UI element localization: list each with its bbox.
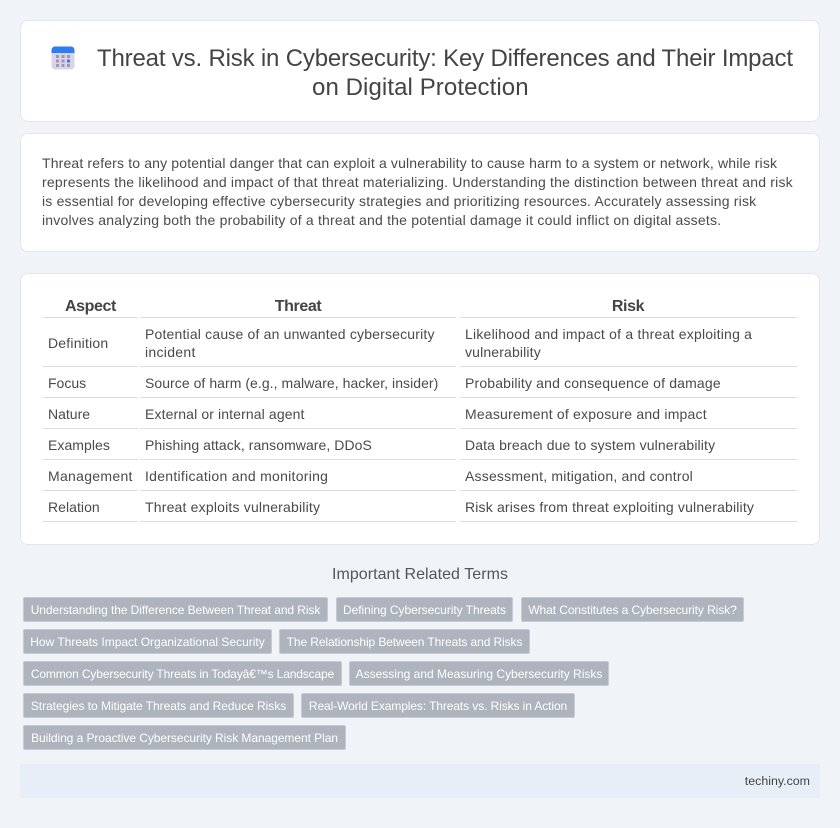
intro text: represents the likelihood and impact of that threat materializing. Understanding the distinction between threat and risk (42, 174, 793, 190)
tag: Common Cybersecurity Threats in Todayâ€™s Landscape (31, 667, 334, 681)
row: relation: Relation (48, 499, 100, 515)
header: threat: Threat (275, 298, 321, 315)
footer bar (20, 764, 820, 798)
row: definition: Definition (48, 335, 108, 351)
comparison table: Identification and monitoring (145, 468, 328, 484)
row: management: Management (48, 468, 133, 484)
row: focus: Focus (48, 375, 86, 391)
related terms tags (23, 597, 744, 750)
header card (20, 20, 820, 122)
comparison table: vulnerability (465, 344, 541, 360)
comparison table: Probability and consequence of damage (465, 375, 721, 391)
tag (23, 629, 272, 654)
tag: Assessing and Measuring Cybersecurity Risks (356, 667, 602, 681)
tag (301, 693, 575, 718)
intro text: is essential for developing effective cybersecurity strategies and prioritizing resources. Accurately assessing risk (42, 193, 756, 209)
intro text (42, 155, 793, 228)
tag (23, 597, 328, 622)
tag (279, 629, 530, 654)
comparison table: Assessment, mitigation, and control (465, 468, 693, 484)
header: risk: Risk (612, 298, 644, 315)
tag: Understanding the Difference Between Threat and Risk (31, 603, 320, 617)
tag: Strategies to Mitigate Threats and Reduce Risks (31, 699, 286, 713)
comparison table: incident (145, 344, 196, 360)
footer source text: techiny.com (745, 774, 810, 788)
tag (336, 597, 513, 622)
comparison table: Source of harm (e.g., malware, hacker, insider) (145, 375, 438, 391)
comparison table: Threat exploits vulnerability (145, 499, 320, 515)
comparison table: Potential cause of an unwanted cybersecurity (145, 326, 435, 342)
title: Threat vs. Risk in Cybersecurity: Key Differences and Their Impact (97, 45, 793, 72)
comparison table: Data breach due to system vulnerability (465, 437, 715, 453)
title: on Digital Protection (312, 74, 529, 101)
comparison table: Likelihood and impact of a threat exploiting a (465, 326, 752, 342)
tag (23, 693, 294, 718)
tag (349, 661, 609, 686)
tag (23, 661, 342, 686)
tag: Defining Cybersecurity Threats (343, 603, 506, 617)
tag (521, 597, 744, 622)
tag: How Threats Impact Organizational Security (30, 635, 265, 649)
row: nature: Nature (48, 406, 90, 422)
header: aspect: Aspect (65, 298, 116, 315)
row: examples: Examples (48, 437, 110, 453)
comparison table: Risk arises from threat exploiting vulnerability (465, 499, 754, 515)
comparison table (43, 298, 797, 522)
comparison table: Measurement of exposure and impact (465, 406, 707, 422)
icon: calendar (52, 46, 74, 70)
related terms heading: Important Related Terms (332, 566, 508, 583)
intro panel (20, 133, 820, 252)
tag: Real-World Examples: Threats vs. Risks in Action (309, 699, 567, 713)
comparison table: External or internal agent (145, 406, 305, 422)
intro text: Threat refers to any potential danger that can exploit a vulnerability to cause harm to a system or network, while risk (42, 155, 777, 171)
intro text: involves analyzing both the probability of a threat and the potential damage it could inflict on digital assets. (42, 212, 721, 228)
tag: Building a Proactive Cybersecurity Risk Management Plan (31, 731, 338, 745)
tag: The Relationship Between Threats and Risks (287, 635, 522, 649)
title (97, 45, 793, 101)
comparison table panel (20, 273, 820, 545)
comparison table: Phishing attack, ransomware, DDoS (145, 437, 372, 453)
tag (23, 725, 346, 750)
tag: What Constitutes a Cybersecurity Risk? (528, 603, 737, 617)
